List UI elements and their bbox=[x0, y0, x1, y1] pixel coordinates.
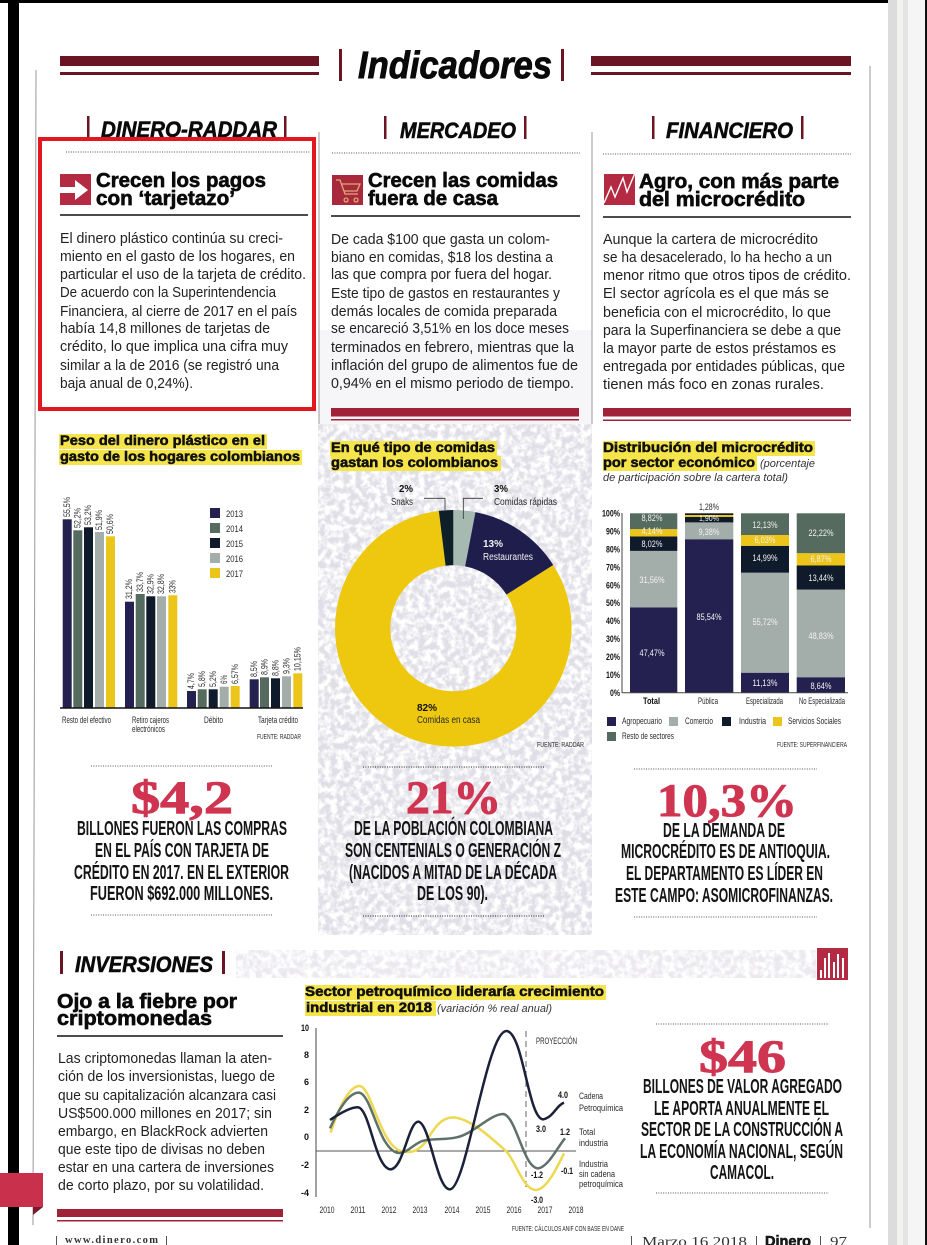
stacked bar chart: microcrédito: 48,83% bbox=[808, 631, 834, 641]
article heading bbox=[368, 170, 558, 210]
article heading: fuera de casa bbox=[368, 188, 499, 210]
line chart: crecimiento industrial: 2010 bbox=[320, 1205, 334, 1215]
chart heading: sector petroquímico: Sector petroquímico lideraría crecimiento bbox=[305, 983, 604, 999]
article body text: particular el uso de la tarjeta de crédito. bbox=[60, 267, 306, 283]
bar chart: peso del dinero plástico: Retiro cajeros bbox=[132, 715, 169, 725]
chart legend: years: 2016 bbox=[226, 554, 243, 564]
callout: 21%: DE LOS 90). bbox=[417, 883, 488, 905]
chart legend: sectors: Servicios Sociales bbox=[788, 716, 841, 726]
article heading: Agro, con más parte bbox=[639, 171, 839, 193]
article body text: beneficia con el microcrédito, lo que bbox=[603, 305, 831, 321]
stacked bar chart: microcrédito: 8,82% bbox=[642, 513, 662, 523]
chart heading: tipo de comidas bbox=[330, 439, 501, 471]
article body text: Financiera, al cierre de 2017 en el país bbox=[60, 304, 297, 320]
line chart: crecimiento industrial: 6 bbox=[304, 1077, 309, 1087]
panel: Inversiones section bbox=[57, 948, 848, 1233]
icon: shopping cart bbox=[332, 175, 363, 205]
callout: $4,2 billones bbox=[74, 772, 289, 905]
stacked bar chart: microcrédito: 8,02% bbox=[642, 539, 662, 549]
bar chart: peso del dinero plástico: electrónicos bbox=[132, 724, 165, 734]
chart legend: sectors: Comercio bbox=[685, 716, 713, 726]
stacked bar chart: microcrédito bbox=[602, 502, 848, 749]
stacked bar chart: microcrédito: 47,47% bbox=[640, 648, 664, 658]
stacked bar chart: microcrédito: 20% bbox=[606, 652, 620, 662]
callout: $46 billones: CAMACOL. bbox=[710, 1162, 774, 1184]
chart heading: sector petroquímico: (variación % real anual) bbox=[437, 1003, 552, 1015]
article body text: entregada por entidades públicas, que bbox=[603, 359, 845, 375]
chart heading: peso del dinero plástico: gasto de los hogares colombianos bbox=[60, 448, 300, 464]
panel: Dinero-Raddar column bbox=[59, 116, 310, 915]
stacked bar chart: microcrédito: 10% bbox=[606, 670, 620, 680]
article body text: similar a la de 2016 (se registró una bbox=[60, 358, 280, 374]
article body text: ción de los inversionistas, luego de bbox=[58, 1069, 275, 1085]
bar chart: peso del dinero plástico: 10,15% bbox=[292, 647, 302, 671]
article body text: tienen más foco en zonas rurales. bbox=[603, 377, 824, 393]
article heading: del microcrédito bbox=[639, 189, 805, 211]
bar chart: peso del dinero plástico bbox=[60, 497, 303, 741]
stacked bar chart: microcrédito: Total bbox=[643, 696, 660, 706]
line chart: crecimiento industrial: 2 bbox=[304, 1105, 309, 1115]
stacked bar chart: microcrédito: 13,44% bbox=[808, 573, 834, 583]
main header: Indicadores bbox=[60, 45, 851, 87]
stacked bar chart: microcrédito: 55,72% bbox=[752, 617, 778, 627]
line chart: crecimiento industrial: -0.1 bbox=[561, 1166, 573, 1176]
article body text: biano en comidas, $18 los destina a bbox=[331, 250, 554, 266]
article body text: inflación del grupo de alimentos fue de bbox=[331, 358, 578, 374]
section title: Inversiones: INVERSIONES bbox=[75, 952, 213, 977]
stacked bar chart: microcrédito: 12,13% bbox=[752, 520, 778, 530]
section title: Financiero: FINANCIERO bbox=[666, 118, 793, 143]
red highlight box bbox=[40, 139, 314, 409]
article heading bbox=[96, 170, 266, 210]
stacked bar chart: microcrédito: FUENTE: SUPERFINANCIERA bbox=[777, 740, 847, 749]
bar chart: peso del dinero plástico: 8,8% bbox=[270, 660, 280, 676]
donut chart: tipo de comidas: Restaurantes bbox=[483, 552, 533, 563]
stacked bar chart: microcrédito: 85,54% bbox=[696, 612, 722, 622]
bar chart: peso del dinero plástico: 5,8% bbox=[197, 671, 207, 687]
article body text: para la Superfinanciera se debe a que bbox=[603, 323, 841, 339]
article heading: criptomonedas bbox=[57, 1008, 212, 1030]
section title: Mercadeo: MERCADEO bbox=[400, 118, 516, 143]
stacked bar chart: microcrédito: No Especializada bbox=[799, 696, 845, 706]
chart legend: years: 2014 bbox=[226, 524, 243, 534]
article body text: la mayor parte de estos préstamos es bbox=[603, 341, 836, 357]
article heading: Ojo a la fiebre por bbox=[57, 991, 237, 1013]
article body text: las que compra por fuera del hogar. bbox=[331, 267, 552, 283]
donut chart: tipo de comidas: 2% bbox=[399, 484, 413, 495]
article body text: baja anual de 0,24%). bbox=[60, 376, 193, 392]
chart heading: microcrédito: por sector económico bbox=[603, 454, 755, 470]
stacked bar chart: microcrédito: 4,14% bbox=[642, 526, 662, 536]
callout: 10,3%: DE LA DEMANDA DE bbox=[663, 820, 785, 842]
panel: Financiero column bbox=[602, 116, 851, 917]
line chart: crecimiento industrial: sin cadena bbox=[579, 1169, 615, 1179]
article body text: terminados en febrero, mientras que la bbox=[331, 340, 575, 356]
article heading: Crecen los pagos bbox=[96, 170, 266, 192]
line chart: crecimiento industrial: 2017 bbox=[538, 1205, 552, 1215]
article body text: había 14,8 millones de tarjetas de bbox=[60, 321, 270, 337]
article body text: De cada $100 que gasta un colom- bbox=[331, 232, 550, 248]
article heading bbox=[639, 171, 839, 211]
article body text: crédito, lo que implica una cifra muy bbox=[60, 339, 289, 355]
article heading bbox=[57, 991, 237, 1030]
stacked bar chart: microcrédito: 0% bbox=[610, 688, 620, 698]
line chart: crecimiento industrial: Petroquímica bbox=[579, 1103, 623, 1113]
bar chart: peso del dinero plástico: 8,9% bbox=[260, 659, 270, 675]
line chart: crecimiento industrial: 2013 bbox=[412, 1205, 428, 1215]
stacked bar chart: microcrédito: 11,13% bbox=[752, 678, 778, 688]
bar chart: peso del dinero plástico: 6% bbox=[219, 675, 229, 684]
article body text: De acuerdo con la Superintendencia bbox=[60, 285, 277, 301]
article body text: que su capitalización alcanzara casi bbox=[58, 1088, 276, 1104]
article body text: demás locales de comida preparada bbox=[331, 304, 558, 320]
chart heading: tipo de comidas: En qué tipo de comidas bbox=[331, 439, 495, 455]
stacked bar chart: microcrédito: 70% bbox=[606, 562, 620, 572]
footer bbox=[56, 1233, 847, 1245]
article heading: Crecen las comidas bbox=[368, 170, 558, 192]
article heading: con ‘tarjetazo’ bbox=[96, 188, 235, 210]
chart legend: sectors: Resto de sectores bbox=[622, 731, 674, 741]
donut chart: tipo de comidas: Comidas en casa bbox=[417, 715, 480, 726]
stacked bar chart: microcrédito: 40% bbox=[606, 616, 620, 626]
chart legend: years bbox=[210, 508, 243, 579]
stacked bar chart: microcrédito: 9,38% bbox=[698, 527, 720, 537]
callout: 10,3% bbox=[615, 775, 833, 907]
donut chart: tipo de comidas: Snaks bbox=[391, 497, 413, 508]
article body text: El dinero plástico continúa su creci- bbox=[60, 231, 283, 247]
donut chart: tipo de comidas: FUENTE: RADDAR bbox=[537, 740, 584, 749]
donut chart: tipo de comidas: Comidas rápidas bbox=[494, 497, 557, 508]
line chart: crecimiento industrial: 2016 bbox=[506, 1205, 522, 1215]
stacked bar chart: microcrédito: Pública bbox=[698, 696, 718, 706]
callout: $4,2 billones: EN EL PAÍS CON TARJETA DE bbox=[95, 839, 269, 862]
icon: zigzag chart bbox=[604, 173, 635, 205]
bar chart: peso del dinero plástico: 33,7% bbox=[135, 572, 145, 592]
line chart: crecimiento industrial: 4.0 bbox=[558, 1090, 568, 1100]
stacked bar chart: microcrédito: 90% bbox=[606, 526, 620, 536]
chart heading: sector petroquímico bbox=[305, 983, 606, 1016]
line chart: crecimiento industrial: 0 bbox=[304, 1132, 309, 1142]
line chart: crecimiento industrial: Total bbox=[579, 1127, 595, 1137]
stacked bar chart: microcrédito: 100% bbox=[602, 508, 620, 518]
line chart: crecimiento industrial: -2 bbox=[301, 1160, 309, 1170]
chart heading: microcrédito: de participación sobre la cartera total) bbox=[603, 472, 788, 484]
bar chart: peso del dinero plástico: Tarjeta crédito bbox=[258, 715, 298, 725]
chart legend: sectors: Industria bbox=[739, 716, 766, 726]
callout: $4,2 billones: CRÉDITO EN 2017. EN EL EXTERIOR bbox=[74, 861, 289, 884]
line chart: crecimiento industrial: 8 bbox=[304, 1050, 309, 1060]
bar chart: peso del dinero plástico: 50,6% bbox=[105, 514, 115, 534]
callout: 21%: 21% bbox=[406, 772, 501, 824]
donut chart: tipo de comidas bbox=[363, 484, 584, 749]
callout: 21%: SON CENTENIALS O GENERACIÓN Z bbox=[345, 838, 561, 862]
article body text: estar en una cartera de inversiones bbox=[58, 1160, 274, 1176]
bar chart: peso del dinero plástico: Débito bbox=[204, 715, 223, 725]
stacked bar chart: microcrédito: 30% bbox=[606, 634, 620, 644]
stacked bar chart: microcrédito: 8,64% bbox=[810, 681, 832, 691]
article body text: se encareció 3,51% en los doce meses bbox=[331, 321, 569, 337]
chart heading: peso del dinero plástico: Peso del dinero plástico en el bbox=[60, 432, 265, 448]
line chart: crecimiento industrial: 2015 bbox=[476, 1205, 490, 1215]
callout: $46 billones bbox=[640, 1031, 843, 1184]
chart legend: years: 2015 bbox=[226, 539, 243, 549]
line chart: crecimiento industrial bbox=[301, 1023, 624, 1233]
article body text: menor ritmo que otros tipos de crédito. bbox=[603, 268, 851, 284]
panel: Mercadeo column bbox=[330, 116, 584, 916]
stacked bar chart: microcrédito: 1,28% bbox=[699, 502, 719, 512]
article body text bbox=[603, 232, 851, 393]
stacked bar chart: microcrédito: 50% bbox=[606, 598, 620, 608]
main header: Indicadores: Indicadores bbox=[358, 45, 552, 87]
stacked bar chart: microcrédito: 60% bbox=[606, 580, 620, 590]
article body text: 0,94% en el mismo periodo de tiempo. bbox=[331, 376, 574, 392]
chart heading: sector petroquímico: industrial en 2018 bbox=[306, 999, 432, 1015]
article body text: El sector agrícola es el que más se bbox=[603, 286, 829, 302]
article body text: se ha desacelerado, lo ha hecho a un bbox=[603, 250, 832, 266]
line chart: crecimiento industrial: -3.0 bbox=[531, 1195, 543, 1205]
article body text: miento en el gasto de los hogares, en bbox=[60, 249, 295, 265]
line chart: crecimiento industrial: -1.2 bbox=[531, 1170, 543, 1180]
chart heading: tipo de comidas: gastan los colombianos bbox=[331, 454, 498, 470]
stacked bar chart: microcrédito: 80% bbox=[606, 544, 620, 554]
stacked bar chart: microcrédito: 6,03% bbox=[754, 535, 776, 545]
line chart: crecimiento industrial: 2018 bbox=[568, 1205, 584, 1215]
callout: $46 billones: $46 bbox=[699, 1031, 786, 1083]
line chart: crecimiento industrial: -4 bbox=[301, 1188, 309, 1198]
donut chart: tipo de comidas: 13% bbox=[483, 539, 503, 550]
bar chart: peso del dinero plástico: 32,8% bbox=[156, 574, 166, 594]
line chart: crecimiento industrial: 1.2 bbox=[560, 1127, 570, 1137]
article body text: embargo, en BlackRock advierten bbox=[58, 1124, 268, 1140]
bar chart: peso del dinero plástico: 53,2% bbox=[83, 505, 93, 525]
stacked bar chart: microcrédito: 14,99% bbox=[752, 553, 778, 563]
bar chart: peso del dinero plástico: 52,2% bbox=[72, 508, 82, 528]
callout: 10,3%: 10,3% bbox=[657, 775, 797, 827]
donut chart: tipo de comidas: 82% bbox=[417, 703, 437, 714]
bar chart: peso del dinero plástico: 31,2% bbox=[124, 579, 134, 599]
icon: arrow bbox=[60, 174, 91, 205]
chart heading: microcrédito: (porcentaje bbox=[760, 458, 815, 470]
bar chart: peso del dinero plástico: 6,57% bbox=[230, 664, 240, 684]
article body text bbox=[58, 1051, 276, 1194]
article body text: Aunque la cartera de microcrédito bbox=[603, 232, 818, 248]
callout: $4,2 billones: FUERON $692.000 MILLONES. bbox=[90, 883, 273, 905]
bar chart: peso del dinero plástico: 33% bbox=[168, 580, 178, 593]
callout: $4,2 billones: $4,2 bbox=[131, 772, 233, 824]
bar chart: peso del dinero plástico: 51,9% bbox=[94, 510, 104, 530]
line chart: crecimiento industrial: Cadena bbox=[579, 1091, 603, 1101]
chart heading: microcrédito bbox=[603, 439, 815, 484]
stacked bar chart: microcrédito: 22,22% bbox=[808, 528, 834, 538]
bar chart: peso del dinero plástico: FUENTE: RADDAR bbox=[257, 732, 301, 741]
line chart: crecimiento industrial: 2012 bbox=[382, 1205, 396, 1215]
line chart: crecimiento industrial: 10 bbox=[301, 1023, 309, 1033]
article body text: Las criptomonedas llaman la aten- bbox=[58, 1051, 272, 1067]
stacked bar chart: microcrédito: 1,90% bbox=[699, 514, 719, 523]
article body text: que este tipo de divisas no deben bbox=[58, 1142, 265, 1158]
article body text bbox=[331, 232, 578, 392]
article body text: de corto plazo, por su volatilidad. bbox=[58, 1178, 264, 1194]
line chart: crecimiento industrial: petroquímica bbox=[579, 1179, 623, 1189]
chart legend: sectors bbox=[607, 716, 841, 741]
bar chart: peso del dinero plástico: 5,2% bbox=[208, 671, 218, 687]
bar chart: peso del dinero plástico: 55,5% bbox=[62, 497, 72, 517]
donut chart: tipo de comidas: 3% bbox=[494, 484, 508, 495]
chart legend: sectors: Agropecuario bbox=[622, 716, 662, 726]
article body text bbox=[60, 231, 306, 392]
icon: bars bbox=[817, 948, 848, 980]
line chart: crecimiento industrial: 2014 bbox=[444, 1205, 460, 1215]
article body text: US$500.000 millones en 2017; sin bbox=[58, 1106, 272, 1122]
section title: Dinero-Raddar: DINERO-RADDAR bbox=[101, 117, 277, 142]
bar chart: peso del dinero plástico: 9,3% bbox=[282, 658, 292, 674]
article body text: Este tipo de gastos en restaurantes y bbox=[331, 286, 561, 302]
callout: 21%: DE LA POBLACIÓN COLOMBIANA bbox=[354, 816, 553, 840]
stacked bar chart: microcrédito: Especializada bbox=[746, 696, 783, 706]
chart legend: years: 2017 bbox=[226, 569, 243, 579]
bar chart: peso del dinero plástico: 8,5% bbox=[249, 661, 259, 677]
line chart: crecimiento industrial: 3.0 bbox=[536, 1124, 546, 1134]
callout: $4,2 billones: BILLONES FUERON LAS COMPRAS bbox=[77, 818, 287, 840]
bar chart: peso del dinero plástico: 32,9% bbox=[146, 574, 156, 594]
line chart: crecimiento industrial: FUENTE: CÁLCULOS ANIF CON BASE EN DANE bbox=[512, 1224, 624, 1233]
bar chart: peso del dinero plástico: 4,7% bbox=[186, 673, 196, 689]
bar chart: peso del dinero plástico: Resto del efectivo bbox=[62, 715, 111, 725]
line chart: crecimiento industrial: industria bbox=[579, 1138, 608, 1148]
red page tab bbox=[0, 1173, 43, 1215]
callout: 21% bbox=[345, 772, 561, 905]
callout: 21%: (NACIDOS A MITAD DE LA DÉCADA bbox=[349, 861, 557, 884]
line chart: crecimiento industrial: 2011 bbox=[350, 1205, 366, 1215]
chart heading: peso del dinero plástico bbox=[59, 432, 302, 465]
chart heading: microcrédito: Distribución del microcrédito bbox=[603, 439, 813, 455]
line chart: crecimiento industrial: Industria bbox=[579, 1159, 608, 1169]
line chart: crecimiento industrial: PROYECCIÓN bbox=[536, 1036, 577, 1046]
stacked bar chart: microcrédito: 31,56% bbox=[640, 575, 664, 585]
chart legend: years: 2013 bbox=[226, 509, 243, 519]
stacked bar chart: microcrédito: 6,87% bbox=[810, 554, 832, 564]
